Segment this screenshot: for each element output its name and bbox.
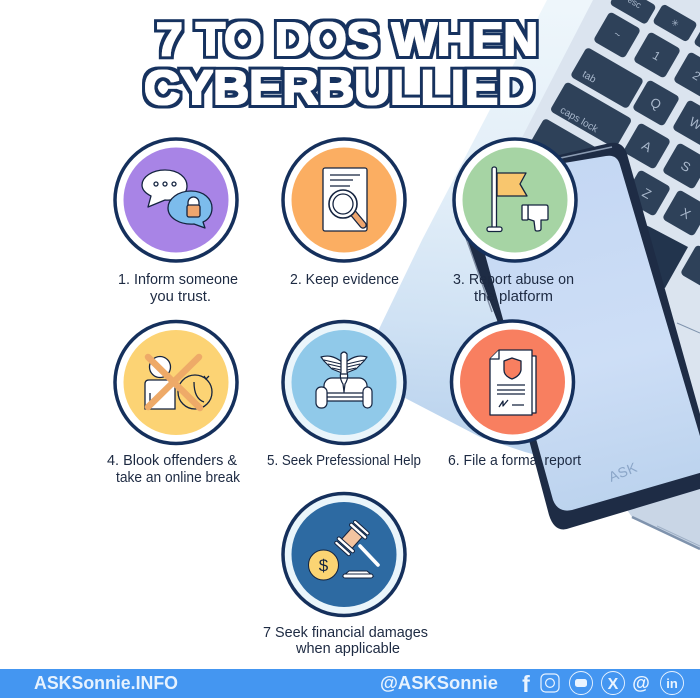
title: CYBERBULLIED bbox=[144, 62, 534, 115]
social icons: X bbox=[608, 676, 619, 693]
label 4: 4. Blook offenders & bbox=[107, 453, 237, 469]
phone logo: ASK bbox=[606, 459, 640, 485]
social icons bbox=[522, 671, 684, 697]
trackpad line bbox=[677, 323, 700, 333]
title: 7 TO DOS WHEN bbox=[156, 13, 538, 65]
laptop base bbox=[500, 0, 700, 549]
icon: document with magnifier bbox=[323, 168, 367, 231]
social icons: f bbox=[522, 671, 530, 697]
keyboard: A bbox=[639, 138, 655, 155]
step 4: block offenders bbox=[107, 322, 241, 486]
keyboard: S bbox=[678, 158, 694, 175]
icon: flag and thumbs down bbox=[487, 167, 548, 232]
keyboard: tab bbox=[580, 69, 598, 86]
footer bar bbox=[0, 669, 700, 698]
icon: signed report with shield bbox=[490, 350, 536, 415]
label 7: when applicable bbox=[295, 641, 400, 657]
title bbox=[144, 13, 538, 115]
laptop lid bbox=[365, 0, 700, 500]
label 3: the platform bbox=[474, 289, 553, 305]
label 3: 3. Report abuse on bbox=[453, 272, 574, 288]
social icons: @ bbox=[632, 673, 650, 693]
keyboard: Z bbox=[640, 185, 654, 202]
step 7: seek financial damages: $ bbox=[319, 556, 329, 575]
label 1: 1. Inform someone bbox=[118, 272, 238, 288]
label 6: 6. File a formal report bbox=[448, 453, 581, 469]
label 4 bbox=[107, 453, 241, 486]
social icons: in bbox=[666, 676, 678, 691]
label 4: take an online break bbox=[116, 470, 241, 486]
laptop base lower edge bbox=[620, 470, 700, 549]
icon: gavel and coin bbox=[308, 519, 378, 580]
keyboard bbox=[528, 0, 700, 292]
step 3: report abuse bbox=[453, 139, 576, 305]
keyboard: ✳ bbox=[669, 17, 681, 29]
keyboard: Q bbox=[648, 94, 664, 112]
step 7: seek financial damages bbox=[263, 494, 428, 657]
keyboard: X bbox=[678, 205, 694, 222]
keyboard: 1 bbox=[650, 48, 663, 64]
label 3 bbox=[453, 272, 574, 305]
step 5: seek professional help bbox=[267, 322, 421, 469]
label 1 bbox=[118, 272, 238, 305]
step 1: inform someone bbox=[115, 139, 238, 305]
keyboard: caps lock bbox=[558, 105, 600, 136]
icon: chat bubbles with lock bbox=[142, 170, 212, 228]
label 2: 2. Keep evidence bbox=[290, 272, 399, 288]
keyboard: ~ bbox=[611, 28, 623, 42]
label 5: 5. Seek Prefessional Help bbox=[267, 453, 421, 469]
icon: person, clock and cross bbox=[145, 356, 212, 409]
website: ASKSonnie.INFO bbox=[34, 673, 178, 693]
step 2: keep evidence bbox=[283, 139, 405, 288]
label 7 bbox=[263, 625, 428, 657]
step 6: file a formal report bbox=[448, 321, 581, 469]
label 7: 7 Seek financial damages bbox=[263, 625, 428, 641]
handle: @ASKSonnie bbox=[380, 673, 498, 693]
label 1: you trust. bbox=[150, 289, 211, 305]
phone bbox=[456, 143, 700, 529]
icon: couch with caduceus bbox=[316, 352, 372, 408]
